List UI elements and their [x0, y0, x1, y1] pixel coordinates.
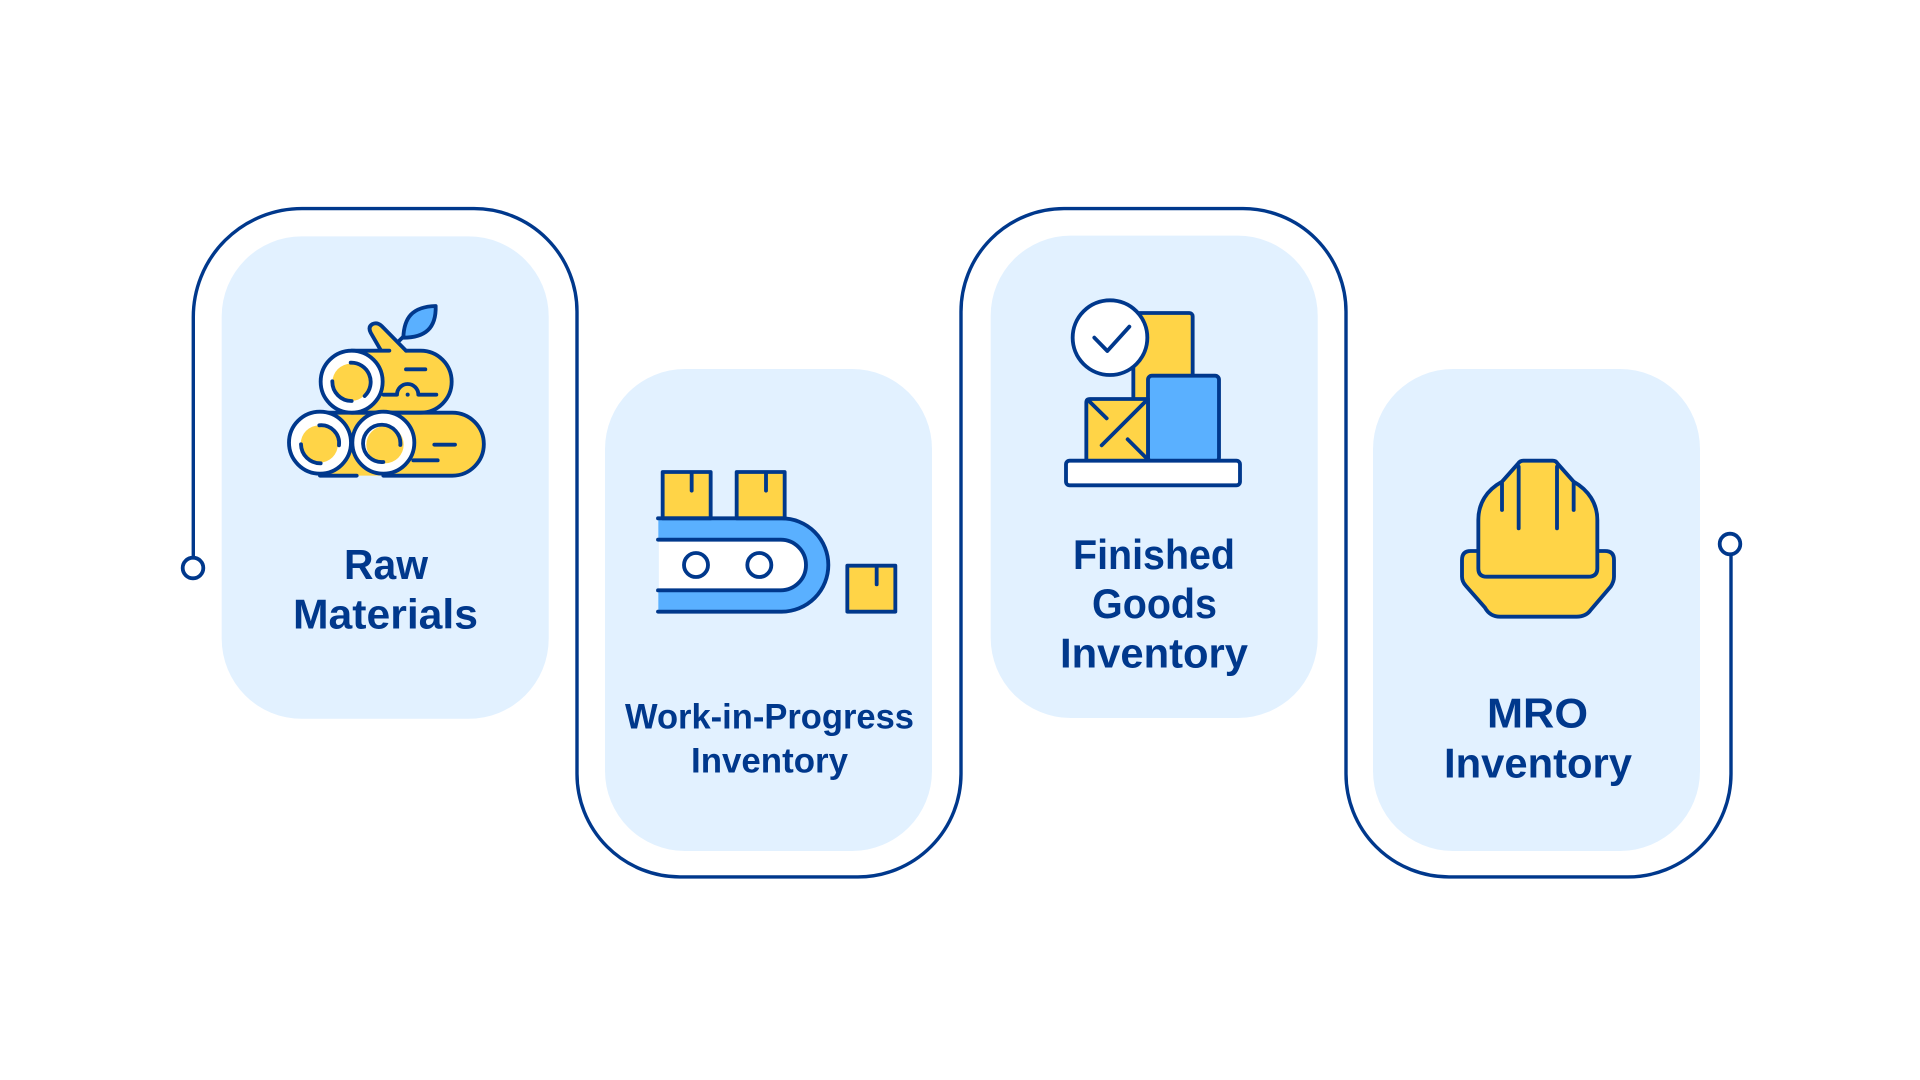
panel background [605, 369, 932, 851]
panel background [222, 236, 549, 719]
icon: hard hat [1462, 461, 1614, 617]
label: MRO Inventory: MRO [1487, 690, 1588, 736]
label: Raw Materials [293, 541, 478, 638]
icon: conveyor belt with boxes [658, 472, 895, 612]
panel background [991, 236, 1318, 718]
connector line winding around the panels [183, 209, 1740, 877]
label: Work-in-Progress Inventory: Inventory [691, 741, 849, 780]
panel: finished goods inventory [991, 236, 1318, 718]
label: MRO Inventory: Inventory [1444, 740, 1633, 786]
label: Finished Goods Inventory: Inventory [1060, 629, 1249, 676]
icon: stacked logs with leaf [289, 306, 484, 476]
label: Work-in-Progress Inventory: Work-in-Progress [625, 698, 914, 736]
label: MRO Inventory [1444, 690, 1633, 786]
panel: MRO inventory [1373, 369, 1700, 851]
panel: work-in-progress inventory [605, 369, 932, 851]
panel background [1373, 369, 1700, 851]
icon: packed boxes with check mark [1066, 300, 1240, 485]
panel: raw materials [222, 236, 549, 719]
label: Finished Goods Inventory: Finished [1073, 531, 1235, 578]
label: Finished Goods Inventory [1060, 531, 1249, 676]
label: Raw Materials: Materials [293, 591, 478, 638]
label: Work-in-Progress Inventory [625, 698, 914, 780]
label: Finished Goods Inventory: Goods [1092, 580, 1217, 627]
label: Raw Materials: Raw [344, 541, 428, 588]
